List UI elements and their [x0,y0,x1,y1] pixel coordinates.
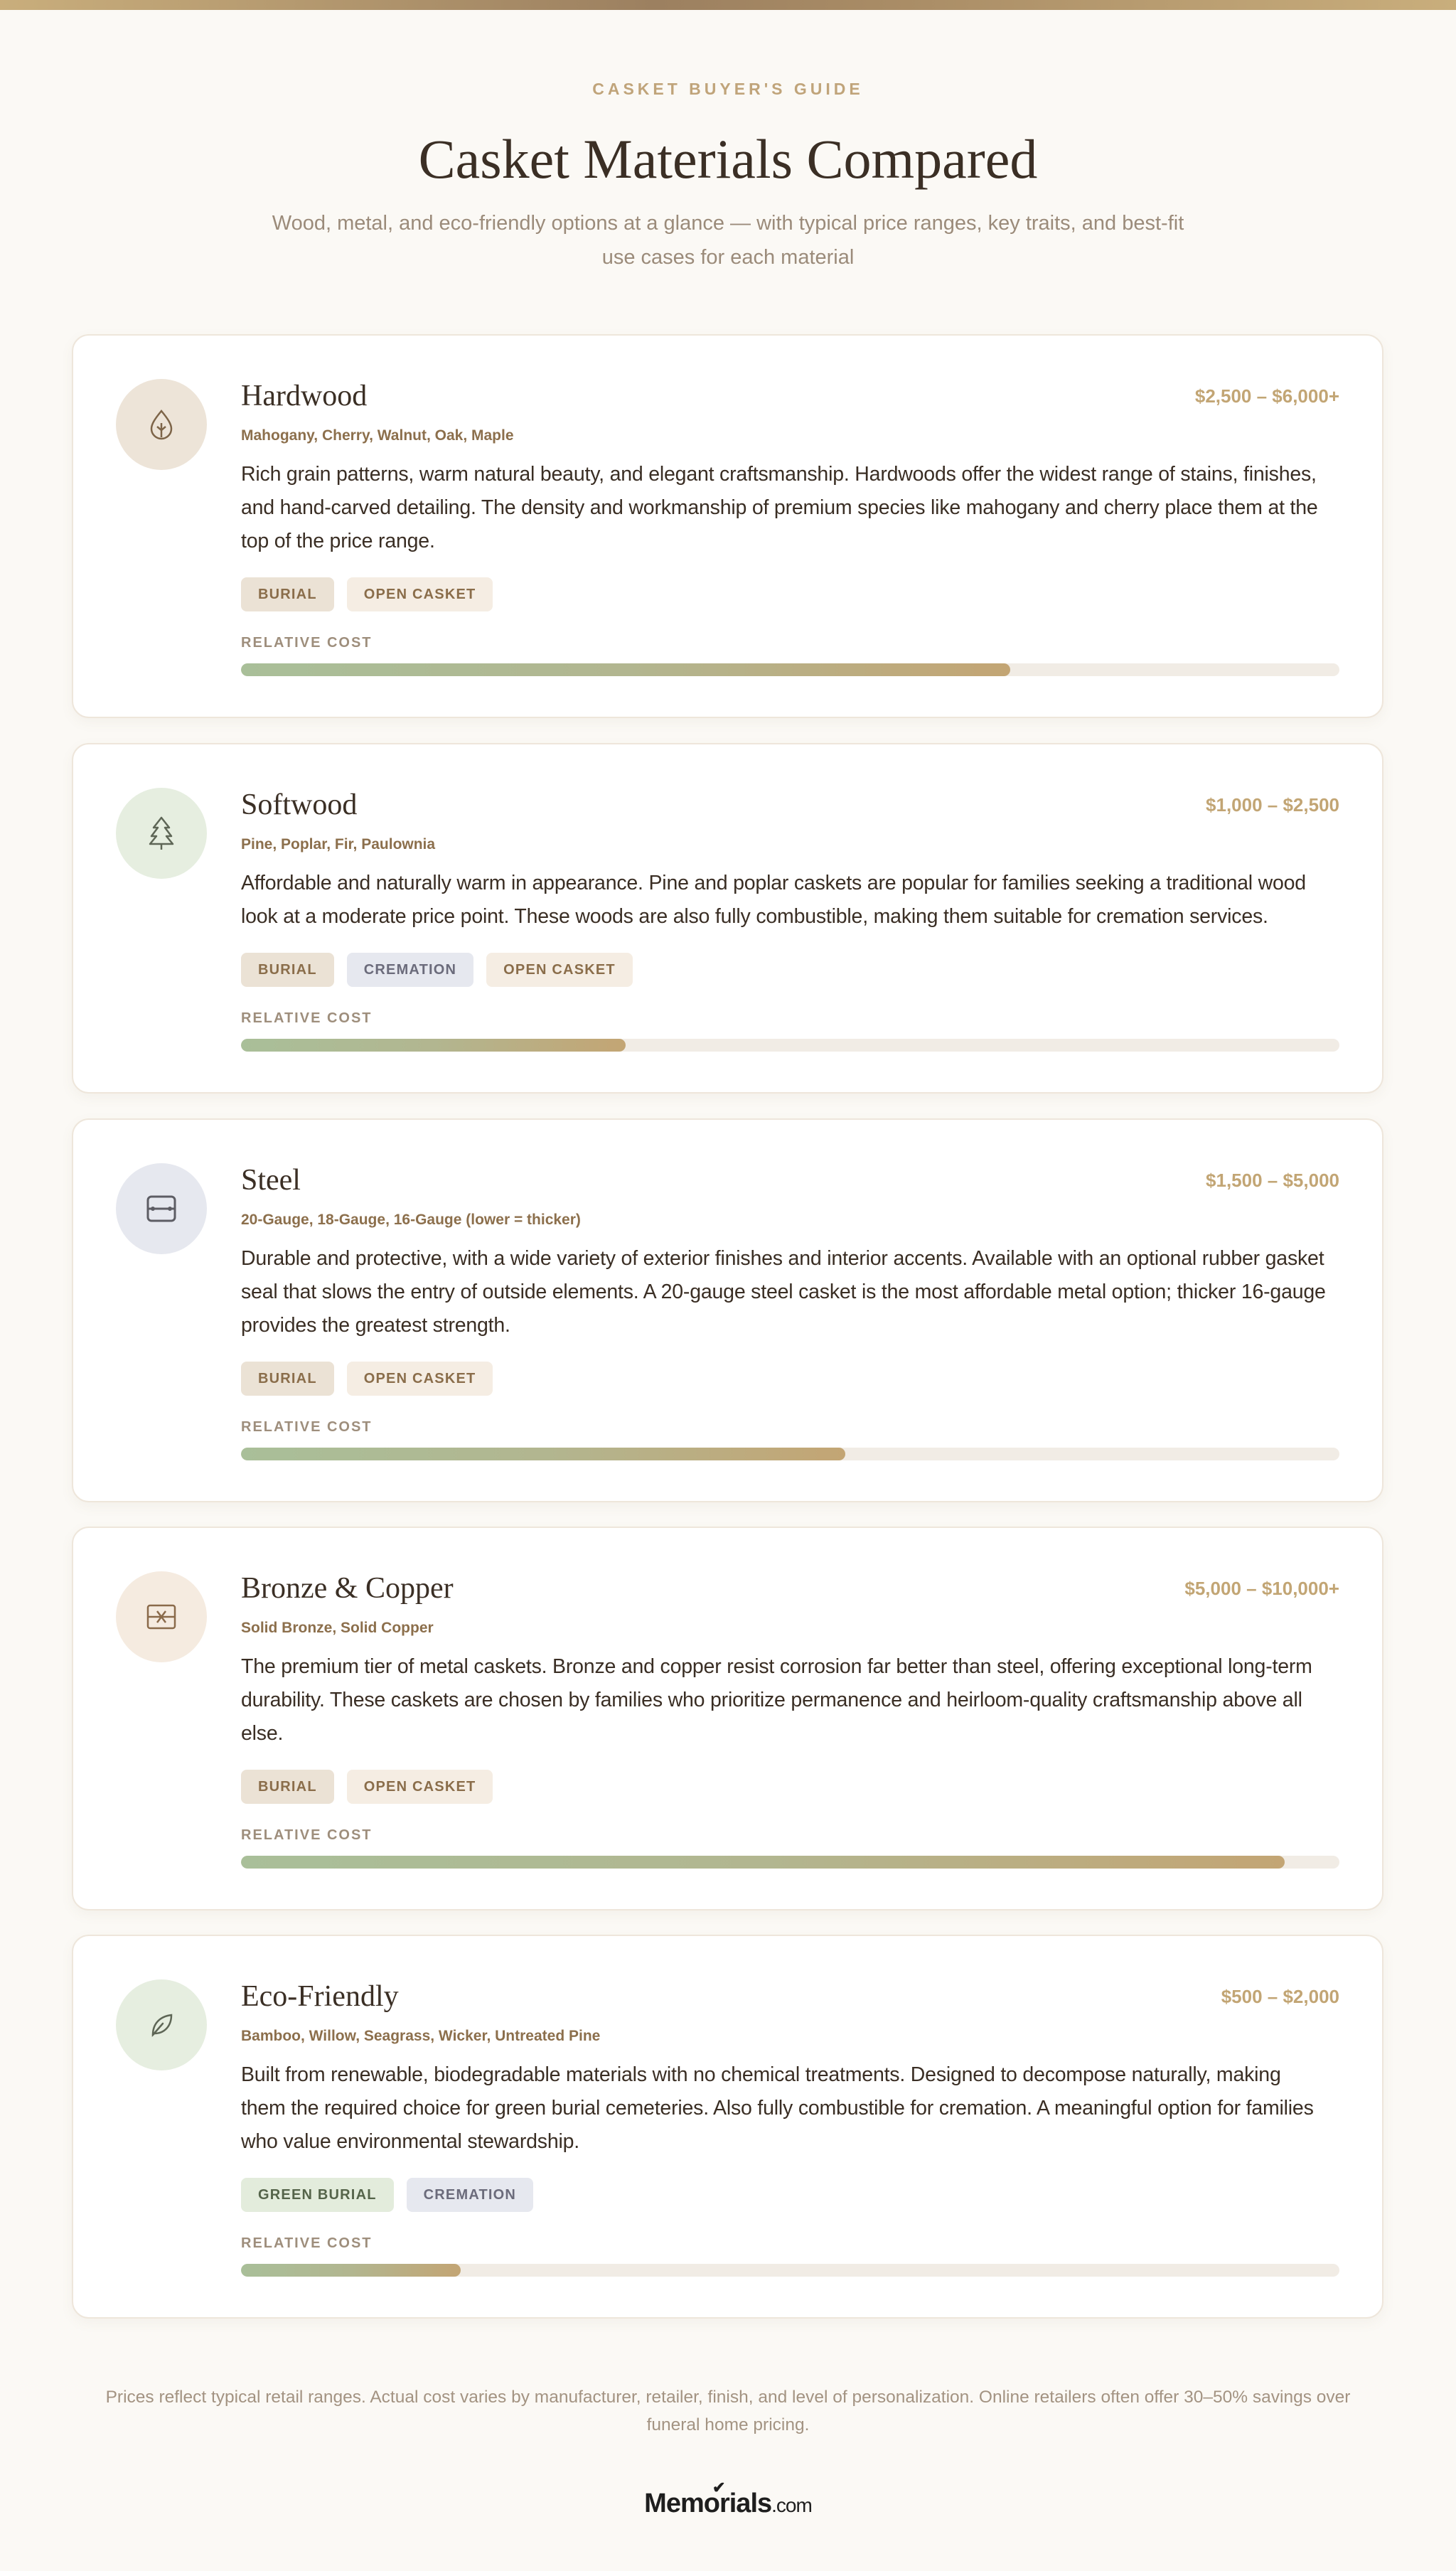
description: them the required choice for green burial cemeteries. Also fully combustible for cremation. A meaningful option for families [241,2097,1314,2120]
tags: OPEN CASKET [364,587,476,602]
price: $1,000 – $2,500 [1206,794,1339,816]
label: RELATIVE COST [241,635,373,651]
icon: leaf drop [116,379,207,470]
footnote: Prices reflect typical retail ranges. Actual cost varies by manufacturer, retailer, finish, and level of personalization. Online retailers often offer 30–50% savings over [106,2388,1350,2407]
heading: Softwood [241,789,357,821]
description: else. [241,1722,283,1745]
species: Solid Bronze, Solid Copper [241,1620,434,1636]
species: Mahogany, Cherry, Walnut, Oak, Maple [241,427,514,444]
tags: CREMATION [364,962,456,978]
description: and hand-carved detailing. The density and workmanship of premium species like mahogany and cherry place them at the [241,496,1318,519]
kicker: CASKET BUYER'S GUIDE [592,80,864,98]
tags: OPEN CASKET [364,1371,476,1386]
tags [241,2178,533,2212]
description: Affordable and naturally warm in appearance. Pine and poplar caskets are popular for families seeking a traditional wood [241,872,1306,894]
description [241,872,1306,928]
description [241,463,1318,552]
tags [241,953,633,987]
icon: tree [116,788,207,879]
footnote [106,2388,1350,2434]
tags: BURIAL [258,962,317,978]
description [241,1247,1326,1337]
panel: steel [72,1118,1383,1502]
heading: Steel [241,1164,301,1197]
price: $2,500 – $6,000+ [1195,385,1339,407]
text: ✔ [712,2479,724,2496]
species: Pine, Poplar, Fir, Paulownia [241,836,435,852]
tags [241,1362,493,1396]
panel: softwood [72,743,1383,1094]
label: RELATIVE COST [241,1419,373,1435]
tags: BURIAL [258,1779,317,1795]
price: $500 – $2,000 [1221,1986,1339,2007]
icon: bronze box [116,1571,207,1662]
icon: leaf [116,1979,207,2070]
label: RELATIVE COST [241,1827,373,1843]
tags: BURIAL [258,587,317,602]
bar chart [241,1448,1339,1460]
footnote: funeral home pricing. [647,2415,809,2434]
description: Built from renewable, biodegradable materials with no chemical treatments. Designed to decompose naturally, making [241,2063,1281,2086]
tags [241,577,493,611]
tags [241,1770,493,1804]
tags: BURIAL [258,1371,317,1386]
panel: bronze & copper [72,1527,1383,1910]
species: 20-Gauge, 18-Gauge, 16-Gauge (lower = thicker) [241,1212,581,1228]
icon: steel box [116,1163,207,1254]
description [241,2063,1314,2153]
heading: Eco-Friendly [241,1980,399,2013]
description: Durable and protective, with a wide variety of exterior finishes and interior accents. Available with an optional rubber gasket [241,1247,1324,1270]
description: provides the greatest strength. [241,1314,510,1337]
price: $1,500 – $5,000 [1206,1170,1339,1191]
price: $5,000 – $10,000+ [1184,1578,1339,1599]
title: Casket Materials Compared [419,128,1037,190]
species: Bamboo, Willow, Seagrass, Wicker, Untreated Pine [241,2028,600,2044]
bar chart [241,1039,1339,1052]
tags: CREMATION [424,2187,516,2203]
bar chart [241,1856,1339,1869]
logo: Memorials.com [644,2489,812,2518]
subtitle: Wood, metal, and eco-friendly options at a glance — with typical price ranges, key traits, and best-fit [272,212,1184,235]
description: Rich grain patterns, warm natural beauty, and elegant craftsmanship. Hardwoods offer the widest range of stains, finishes, [241,463,1317,486]
description: top of the price range. [241,530,435,552]
heading: Hardwood [241,380,367,412]
tags: OPEN CASKET [503,962,616,978]
description [241,1655,1312,1745]
description: durability. These caskets are chosen by families who prioritize permanence and heirloom-quality craftsmanship above all [241,1689,1302,1711]
label: RELATIVE COST [241,2235,373,2251]
description: The premium tier of metal caskets. Bronze and copper resist corrosion far better than steel, offering exceptional long-term [241,1655,1312,1678]
description: seal that slows the entry of outside elements. A 20-gauge steel casket is the most affordable metal option; thicker 16-gauge [241,1281,1326,1303]
label: RELATIVE COST [241,1010,373,1026]
subtitle [272,212,1184,269]
tags: OPEN CASKET [364,1779,476,1795]
description: who value environmental stewardship. [241,2130,579,2153]
panel: hardwood [72,334,1383,718]
subtitle: use cases for each material [602,246,854,269]
tags: GREEN BURIAL [258,2187,377,2203]
description: look at a moderate price point. These woods are also fully combustible, making them suitable for cremation services. [241,905,1268,928]
bar chart [241,663,1339,676]
bar chart [241,2264,1339,2277]
panel: eco-friendly [72,1935,1383,2319]
heading: Bronze & Copper [241,1572,454,1605]
